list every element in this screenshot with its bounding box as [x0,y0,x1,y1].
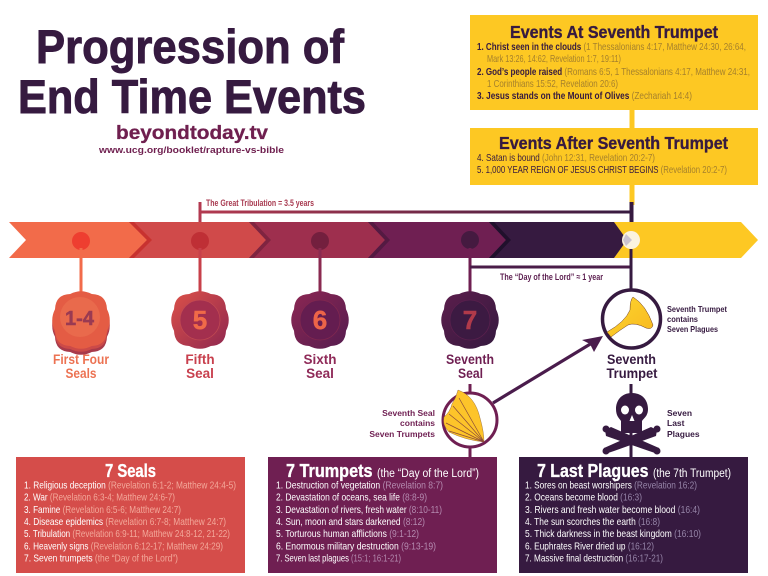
list: 5. Thick darkness in the beast kingdom (16:10) [525,529,701,540]
list [525,480,701,565]
list: 7. Massive final destruction (16:17-21) [525,554,663,565]
list: 4. Disease epidemics (Revelation 6:7-8; Matthew 24:7) [24,517,226,528]
label: first four seals: Seals [66,366,96,381]
list [24,480,236,565]
list: 4. Satan is bound (John 12:31, Revelation 20:2-7) [477,153,655,164]
heading: 7 Seals [105,461,156,481]
icon: skull and crossbones [602,393,660,454]
note: trumpet contains plagues [667,304,727,334]
list: 3. Rivers and fresh water become blood (16:4) [525,505,700,516]
note: seven last plagues: Seven [667,408,692,418]
label: seventh seal: Seal [458,366,483,381]
label: fifth seal: Seal [186,366,214,381]
label: sixth seal: Seal [306,366,334,381]
timeline markers [72,231,640,250]
note: seven last plagues: Last [667,418,685,428]
title [18,20,366,123]
seal: seventh [441,291,499,349]
seal: sixth [291,291,349,349]
note: seal contains trumpets: Seventh Seal [382,408,435,418]
label: sixth seal: Sixth [303,352,337,367]
label: seventh seal: Seventh [446,352,494,367]
label: seventh trumpet: Trumpet [606,366,658,381]
label: seventh trumpet [606,352,658,381]
seal: fifth: 5 [193,305,207,335]
note: seal contains trumpets: contains [400,418,435,428]
list [477,153,727,176]
icon: seven trumpets shell [443,390,497,447]
label: seventh seal [446,352,494,381]
great tribulation bracket [200,198,634,223]
panel: 7 seals [16,457,245,573]
heading: Events At Seventh Trumpet [510,22,718,42]
seal: first four: 1-4 [65,308,95,330]
title: End Time Events [18,70,366,123]
label: first four seals: First Four [53,352,110,367]
list: 3. Devastation of rivers, fresh water (8:10-11) [276,505,442,516]
arrow: seal to trumpet [493,336,603,403]
list: 1 Corinthians 15:52, Revelation 20:6) [487,79,618,90]
label: first four seals [53,352,110,381]
list: 1. Sores on beast worshipers (Revelation 16:2) [525,480,697,492]
tribulation label: The Great Tribulation = 3.5 years [206,198,314,209]
panel: 7 last plagues [519,457,748,573]
panel: 7 trumpets [268,457,497,573]
timeline arrow [9,222,758,258]
list: 4. Sun, moon and stars darkened (8:12) [276,517,425,528]
note: trumpet contains plagues: Seventh Trumpet [667,304,727,314]
seal: first four [52,291,110,355]
heading: 7 Trumpets (the “Day of the Lord”) [286,461,479,481]
seal: sixth: 6 [313,305,327,335]
note: seal contains trumpets: Seven Trumpets [369,429,435,439]
list: 6. Heavenly signs (Revelation 6:12-17; Matthew 24:29) [24,542,223,553]
list: 2. Oceans become blood (16:3) [525,492,642,504]
list: 6. Euphrates River dried up (16:12) [525,542,654,553]
stems [81,248,631,457]
list: 6. Enormous military destruction (9:13-19) [276,542,436,553]
list: 5. Torturous human afflictions (9:1-12) [276,529,419,540]
list: 7. Seven last plagues (15:1; 16:1-21) [276,554,401,565]
booklet url: www.ucg.org/booklet/rapture-vs-bible [98,145,284,156]
list [477,42,750,102]
list: 3. Jesus stands on the Mount of Olives (Zechariah 14:4) [477,91,692,102]
heading: Events After Seventh Trumpet [499,133,728,153]
list: 5. Tribulation (Revelation 6:9-11; Matthew 24:8-12, 21-22) [24,529,230,540]
day of the lord label: The “Day of the Lord” ≈ 1 year [500,272,603,283]
list: 1. Religious deception (Revelation 6:1-2; Matthew 24:4-5) [24,480,236,492]
note: trumpet contains plagues: contains [667,314,698,324]
list: 2. Devastation of oceans, sea life (8:8-9) [276,492,427,504]
list: 3. Famine (Revelation 6:5-6; Matthew 24:7) [24,505,181,516]
title: Progression of [36,20,344,73]
seal: seventh: 7 [463,305,477,335]
label: fifth seal: Fifth [185,352,215,367]
list [276,480,443,565]
website: beyondtoday.tv [116,123,268,144]
seal: fifth [171,291,229,349]
panel: events after seventh trumpet [470,128,758,185]
heading: 7 Last Plagues (the 7th Trumpet) [537,461,731,481]
list: 1. Destruction of vegetation (Revelation 8:7) [276,480,443,492]
list: 5. 1,000 YEAR REIGN OF JESUS CHRIST BEGINS (Revelation 20:2-7) [477,165,727,176]
icon: seventh trumpet [602,290,660,348]
list: 2. War (Revelation 6:3-4; Matthew 24:6-7) [24,492,175,504]
panel: events at seventh trumpet [470,15,758,110]
note: trumpet contains plagues: Seven Plagues [667,324,718,334]
list: 4. The sun scorches the earth (16:8) [525,517,660,528]
note: seven last plagues: Plagues [667,429,700,439]
connector between yellow boxes [630,105,634,205]
label: seventh trumpet: Seventh [607,352,656,367]
list: 7. Seven trumpets (the “Day of the Lord”) [24,554,178,565]
list: Mark 13:26, 14:62, Revelation 1:7, 19:11) [487,54,621,65]
